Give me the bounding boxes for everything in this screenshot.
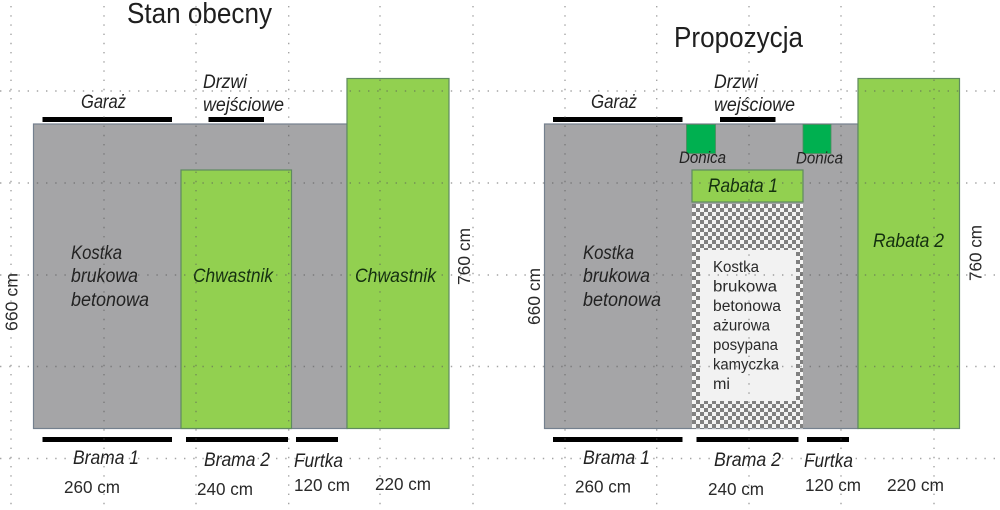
label: Kostka brukowa betonowa: Kostka: [71, 242, 122, 264]
label: Kostka brukowa betonowa: brukowa: [583, 265, 650, 287]
label: Kostka brukowa betonowa: betonowa: [71, 289, 149, 311]
label: Rabata 1: Rabata 1: [708, 175, 778, 197]
label: Drzwi wejściowe: wejściowe: [714, 94, 795, 116]
wicket bar: [807, 437, 849, 442]
dimension: 660 cm: 660 cm: [2, 273, 22, 331]
panel: current state: [2, 0, 474, 499]
dimension: 260 cm: 260 cm: [575, 476, 631, 496]
label: Drzwi wejściowe: [714, 71, 795, 116]
garage bar: [553, 117, 682, 122]
text: permeable paving description: brukowa: [713, 278, 777, 296]
label: Brama 2: Brama 2: [714, 449, 781, 471]
door bar: [720, 117, 776, 122]
bed 2: [858, 78, 960, 428]
paved area: [34, 124, 347, 428]
label: Donica left: Donica: [679, 148, 726, 167]
weed patch centre: [181, 170, 292, 428]
text: permeable paving description: ażurowa: [713, 318, 770, 334]
weed patch right: [347, 78, 449, 428]
label: Donica right: Donica: [796, 148, 843, 168]
label: Garaż: Garaż: [591, 91, 637, 113]
label: Chwastnik centre: Chwastnik: [193, 265, 274, 287]
text: permeable paving description: kamyczka: [713, 356, 779, 374]
bed 1: [692, 170, 803, 202]
label: Rabata 2: Rabata 2: [873, 230, 944, 252]
title: Propozycja: Propozycja: [674, 22, 804, 54]
dimension: 240 cm: 240 cm: [197, 479, 253, 499]
text: permeable paving description: posypana: [713, 337, 778, 354]
garage bar: [42, 117, 172, 122]
label: Kostka brukowa betonowa: [583, 242, 661, 311]
wicket bar: [296, 437, 338, 442]
label: Kostka brukowa betonowa: brukowa: [71, 265, 138, 287]
label: Drzwi wejściowe: Drzwi: [203, 71, 248, 93]
label: Garaż: Garaż: [81, 91, 126, 113]
label: Drzwi wejściowe: wejściowe: [203, 94, 284, 116]
label: Drzwi wejściowe: Drzwi: [714, 71, 759, 93]
dimension: 260 cm: 260 cm: [64, 477, 120, 497]
text: permeable paving description: mi: [713, 376, 730, 393]
dimension: 760 cm: 760 cm: [966, 225, 986, 281]
door bar: [208, 117, 264, 122]
label: Chwastnik right: Chwastnik: [355, 265, 437, 287]
permeable paving checker: [692, 204, 803, 428]
dimension: 120 cm: 120 cm: [294, 475, 350, 495]
label: Kostka brukowa betonowa: Kostka: [583, 242, 634, 264]
dimension: 220 cm: 220 cm: [887, 475, 944, 495]
label: Kostka brukowa betonowa: betonowa: [583, 289, 661, 311]
text: permeable paving description: [713, 259, 781, 393]
label: Brama 2: Brama 2: [204, 449, 270, 471]
paving description box: [700, 250, 796, 401]
gate 1 bar: [42, 437, 172, 442]
planter right: [803, 124, 831, 154]
label: Brama 1: Brama 1: [73, 447, 139, 469]
label: Furtka: Furtka: [804, 450, 853, 472]
dimension: 760 cm: 760 cm: [454, 228, 474, 285]
label: Drzwi wejściowe: [203, 71, 284, 116]
gate 2 bar: [696, 437, 798, 442]
planter left: [686, 124, 716, 154]
paved area: [544, 124, 858, 428]
label: Brama 1: Brama 1: [583, 447, 650, 469]
panel: proposal: [524, 22, 986, 499]
dimension: 240 cm: 240 cm: [708, 479, 764, 499]
label: Furtka: Furtka: [294, 450, 343, 472]
dimension: 220 cm: 220 cm: [375, 474, 431, 494]
dimension: 660 cm: 660 cm: [524, 268, 544, 325]
text: permeable paving description: Kostka: [713, 259, 759, 276]
gate 2 bar: [186, 437, 288, 442]
dimension: 120 cm: 120 cm: [805, 475, 861, 495]
gate 1 bar: [553, 437, 682, 442]
text: permeable paving description: betonowa: [713, 298, 781, 315]
label: Kostka brukowa betonowa: [71, 242, 149, 311]
